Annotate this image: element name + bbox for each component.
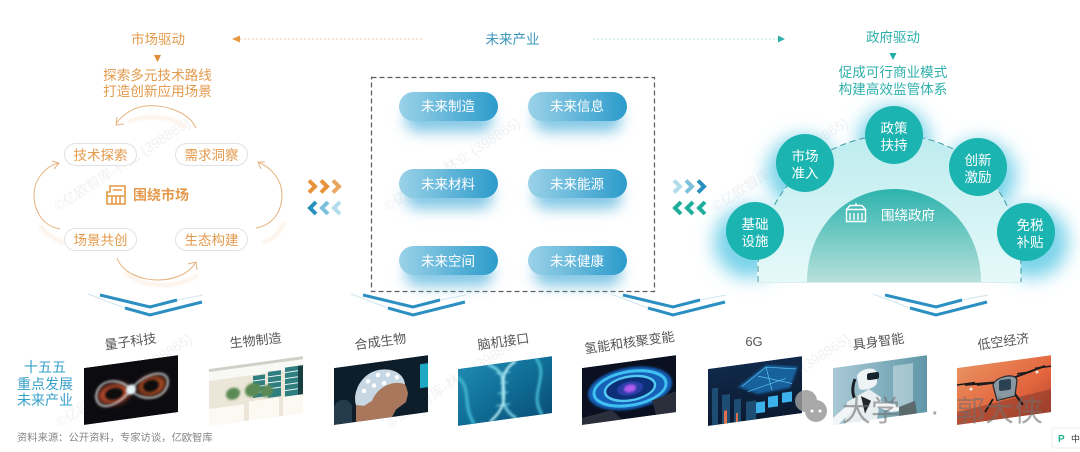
heading: market driven: 市场驱动 [131, 31, 185, 47]
arrow: government down [890, 53, 896, 60]
top connector: government arrow [593, 36, 785, 42]
down chevron 4 [873, 294, 988, 315]
pill: future space: 未来空间 [421, 254, 475, 269]
node: tax subsidies: 免税 [1016, 218, 1044, 233]
pill: demand insight [176, 144, 248, 166]
watermark text [51, 115, 853, 431]
cycle arrows [34, 106, 285, 285]
pill: future information [528, 92, 627, 121]
pill: future energy [528, 169, 627, 198]
icon: market building [107, 186, 125, 204]
dashed arch [758, 135, 1021, 282]
pill: future space [399, 246, 498, 275]
pill: technology exploration [64, 144, 136, 166]
heading: 15th five-year plan: 重点发展 [17, 376, 73, 392]
arch background [757, 135, 1021, 282]
heading: 15th five-year plan: 未来产业 [17, 392, 73, 408]
heading: 15th five-year plan: 十五五 [24, 359, 66, 375]
icon: wechat [795, 390, 827, 422]
image: brain-computer interface [458, 356, 552, 426]
wechat account name: 大学 [842, 395, 900, 428]
arrow: market down [154, 55, 161, 62]
watermark text: ©亿欧智库-林业 (398865) [711, 331, 853, 431]
wechat account name [842, 395, 1043, 428]
label: embodied intelligence: 具身智能 [852, 330, 905, 353]
pill: technology exploration: 技术探索 [74, 148, 128, 163]
icon: government building [846, 203, 866, 222]
node: innovation incentives [949, 138, 1007, 196]
pill: ecosystem building [176, 228, 248, 250]
text block: government goals: 构建高效监管体系 [839, 81, 947, 97]
language widget [1052, 428, 1080, 448]
label: hydrogen and fusion energy: 氢能和核聚变能 [583, 329, 675, 356]
base line [758, 282, 1021, 284]
node: market access [776, 134, 834, 192]
image: 6G [708, 356, 802, 426]
image: hydrogen and fusion energy [582, 355, 676, 425]
box border [372, 78, 654, 292]
node: policy support: 政策 [880, 120, 908, 136]
panel: market driven [34, 31, 285, 285]
wechat account name: 郭大侠 [956, 395, 1043, 428]
pill: ecosystem building: 生态构建 [184, 233, 238, 248]
arrows: left exchange chevrons [309, 180, 340, 214]
text block: market goals: 打造创新应用场景 [103, 83, 212, 99]
pill: future manufacturing [399, 92, 498, 121]
wechat watermark [795, 390, 1043, 428]
down chevron 1 [88, 294, 203, 315]
node: policy support [865, 106, 923, 164]
watermark text: ©亿欧智库-林业 (398865) [51, 115, 193, 215]
heading: future industries: 未来产业 [486, 32, 540, 47]
node: tax subsidies: 补贴 [1016, 235, 1044, 250]
label: low-altitude economy: 低空经济 [977, 330, 1030, 353]
text block: market goals [103, 67, 212, 99]
down chevron 2 [351, 294, 466, 315]
panel: future industries box [372, 78, 654, 292]
language widget: 中 [1071, 433, 1080, 444]
top connector: market arrow [232, 36, 423, 42]
wechat account name: · [930, 396, 940, 428]
image: quantum [84, 355, 178, 425]
glow behind arch [714, 106, 1068, 278]
text block: government goals [839, 65, 948, 97]
pill: future materials: 未来材料 [421, 177, 475, 192]
label: around market: 围绕市场 [133, 187, 189, 203]
language widget: P [1058, 434, 1065, 445]
node: innovation incentives: 创新 [964, 153, 992, 168]
node: innovation incentives: 激励 [964, 170, 992, 185]
heading: 15th five-year plan [17, 359, 73, 408]
pill: scenario co-creation [64, 228, 136, 250]
pill: demand insight: 需求洞察 [184, 147, 239, 163]
panel: government driven [714, 30, 1068, 282]
source note: 资料来源：公开资料，专家访谈，亿欧智库 [17, 431, 213, 444]
pill: future manufacturing: 未来制造 [421, 99, 475, 114]
pill: scenario co-creation: 场景共创 [74, 233, 128, 248]
image: biomanufacturing [209, 356, 303, 426]
watermark text: ©亿欧智库-林业 (398865) [53, 331, 195, 431]
watermark text: ©亿欧智库-林业 (398865) [383, 331, 525, 431]
node: infrastructure [726, 202, 784, 260]
text block: market goals: 探索多元技术路线 [103, 67, 212, 83]
image: low-altitude economy [957, 355, 1051, 425]
heading: government driven: 政府驱动 [866, 30, 920, 45]
node: infrastructure: 基础 [742, 216, 768, 232]
label: 6G: 6G [745, 334, 763, 349]
node: market access: 市场 [792, 148, 818, 164]
arrows: right exchange chevrons [674, 180, 705, 214]
node: policy support: 扶持 [880, 138, 908, 153]
node: tax subsidies [997, 203, 1055, 261]
label: brain-computer interface: 脑机接口 [477, 330, 530, 353]
pill: future health: 未来健康 [550, 253, 604, 269]
watermark text: ©亿欧智库-林业 (398865) [381, 115, 523, 215]
label: synthetic biology: 合成生物 [354, 330, 407, 353]
pill: future health [528, 246, 627, 275]
image: embodied intelligence [833, 355, 927, 425]
node: market access: 准入 [792, 166, 819, 181]
center dome [807, 189, 981, 282]
text block: government goals: 促成可行商业模式 [839, 65, 948, 80]
node: infrastructure: 设施 [742, 234, 769, 249]
watermark text: ©亿欧智库-林业 (398865) [709, 115, 851, 215]
pill: future materials [399, 169, 498, 198]
label: around government: 围绕政府 [881, 208, 935, 223]
pill shadows [405, 106, 622, 286]
image: synthetic biology [334, 355, 428, 425]
label: quantum: 量子科技 [104, 330, 157, 353]
label: biomanufacturing: 生物制造 [229, 330, 282, 351]
pill: future energy: 未来能源 [550, 177, 604, 192]
down chevron 3 [611, 294, 726, 315]
pill: future information: 未来信息 [550, 98, 604, 114]
